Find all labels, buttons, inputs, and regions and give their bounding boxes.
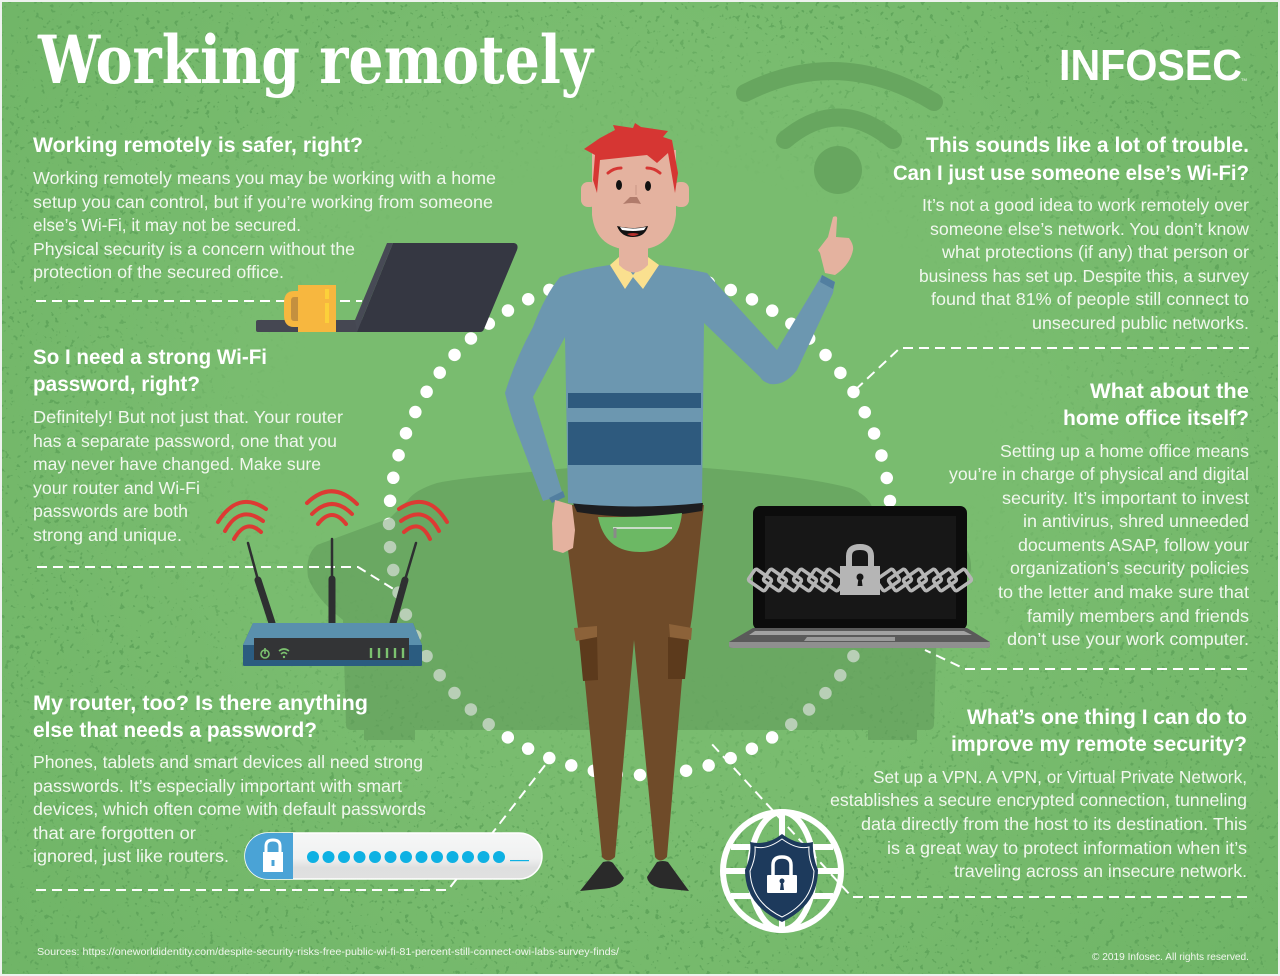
body text: data directly from the host to its destination. This <box>861 814 1247 834</box>
panel: other passwords <box>33 692 426 866</box>
body text: passwords are both <box>33 501 188 521</box>
panel: remote security <box>830 706 1247 881</box>
body text: is a great way to protect information when it’s <box>887 838 1247 858</box>
heading: else that needs a password? <box>33 719 317 742</box>
sweater <box>505 265 835 506</box>
icon: large background wifi symbol <box>745 71 934 194</box>
shield <box>745 834 818 922</box>
body text <box>949 441 1249 649</box>
heading <box>893 134 1249 185</box>
body text: don’t use your work computer. <box>1007 629 1249 649</box>
globe <box>723 812 841 930</box>
panel: working remotely is safer <box>33 134 496 282</box>
chain <box>748 569 972 591</box>
body text: unsecured public networks. <box>1032 313 1249 333</box>
panel: home office <box>949 380 1249 649</box>
body text: family members and friends <box>1027 606 1249 626</box>
heading <box>1063 380 1249 430</box>
body text: organization’s security policies <box>1010 558 1249 578</box>
eyebrows <box>608 168 660 173</box>
heading: Working remotely is safer, right? <box>33 134 363 157</box>
icon: password bar <box>245 833 542 879</box>
heading: This sounds like a lot of trouble. <box>926 134 1249 157</box>
heading: What about the <box>1090 380 1249 403</box>
body text: in antivirus, shred unneeded <box>1023 511 1249 531</box>
pointing hand <box>818 216 853 275</box>
laptop base <box>729 628 990 648</box>
body text: setup you can control, but if you’re working from someone <box>33 192 493 212</box>
heading: So I need a strong Wi-Fi <box>33 346 267 369</box>
eyes <box>616 180 651 191</box>
title: Working remotely <box>37 21 594 99</box>
panel: someone else's wifi <box>893 134 1249 333</box>
ears <box>581 182 689 207</box>
body text: Set up a VPN. A VPN, or Virtual Private Network, <box>873 767 1247 787</box>
body text: establishes a secure encrypted connection, tunneling <box>830 790 1247 810</box>
sources footer: Sources: https://oneworldidentity.com/despite-security-risks-free-public-wi-fi-81-percent-still-connect-owi-labs-survey-finds/ <box>37 946 619 958</box>
laptop lid <box>753 506 967 630</box>
body text: may never have changed. Make sure <box>33 454 321 474</box>
belt <box>573 503 703 517</box>
heading <box>33 346 267 396</box>
body text: someone else’s network. You don’t know <box>930 219 1249 239</box>
heading: password, right? <box>33 373 200 396</box>
icon: chained laptop <box>729 506 990 648</box>
neck <box>619 245 648 272</box>
body text: that are forgotten or <box>33 823 196 843</box>
body text: It’s not a good idea to work remotely over <box>922 195 1249 215</box>
router indicators <box>261 648 403 658</box>
heading <box>951 706 1247 756</box>
icon: coffee mug and closed laptop <box>256 243 518 332</box>
background couch silhouette <box>307 466 971 740</box>
copyright: © 2019 Infosec. All rights reserved. <box>1092 951 1249 963</box>
body text: what protections (if any) that person or <box>941 242 1249 262</box>
body text: protection of the secured office. <box>33 262 284 282</box>
panel: strong wifi password <box>33 346 343 545</box>
fanny pack <box>598 513 682 552</box>
dotted circle <box>389 273 891 775</box>
cargo pockets <box>574 624 692 681</box>
body text: found that 81% of people still connect to <box>931 289 1249 309</box>
antennas <box>248 539 416 623</box>
signal waves <box>218 491 447 539</box>
icon: globe with shield <box>723 812 841 930</box>
lock <box>767 857 797 893</box>
router body <box>243 623 422 666</box>
icon: wifi router <box>218 491 447 666</box>
heading: My router, too? Is there anything <box>33 692 368 715</box>
heading: What’s one thing I can do to <box>967 706 1247 729</box>
shoes <box>580 861 689 891</box>
body text: you’re in charge of physical and digital <box>949 464 1249 484</box>
laptop base <box>256 320 366 332</box>
body text: passwords. It’s especially important with smart <box>33 776 402 796</box>
body text <box>830 767 1247 881</box>
body text: Definitely! But not just that. Your router <box>33 407 343 427</box>
body text: has a separate password, one that you <box>33 431 337 451</box>
mouth <box>617 226 648 237</box>
hair <box>584 123 678 193</box>
heading: home office itself? <box>1063 407 1249 430</box>
nose <box>623 185 641 204</box>
head <box>592 150 676 250</box>
body text: your router and Wi-Fi <box>33 478 200 498</box>
logo: Infosec: INFOSEC <box>1059 41 1242 90</box>
dashed connector lines <box>36 301 1249 897</box>
cuffs <box>549 275 835 503</box>
heading: improve my remote security? <box>951 733 1247 756</box>
left hand <box>552 500 575 553</box>
collar <box>610 257 659 289</box>
illustration: man <box>505 123 853 891</box>
padlock <box>840 547 880 595</box>
lock <box>263 840 283 872</box>
body text <box>33 407 343 545</box>
trousers <box>568 505 704 860</box>
body text: Setting up a home office means <box>1000 441 1249 461</box>
body text <box>33 168 496 282</box>
body text: strong and unique. <box>33 525 182 545</box>
password dots <box>307 851 529 863</box>
body text: documents ASAP, follow your <box>1018 535 1249 555</box>
logo: Infosec: TM <box>1241 77 1247 82</box>
laptop screen <box>357 243 518 332</box>
body text: Phones, tablets and smart devices all need strong <box>33 752 423 772</box>
body text: traveling across an insecure network. <box>954 861 1247 881</box>
body text: devices, which often come with default passwords <box>33 799 426 819</box>
body text: security. It’s important to invest <box>1002 488 1249 508</box>
body text: ignored, just like routers. <box>33 846 229 866</box>
heading: Can I just use someone else’s Wi-Fi? <box>893 162 1249 185</box>
body text: else’s Wi-Fi, it may not be secured. <box>33 215 301 235</box>
body text <box>919 195 1249 333</box>
heading <box>33 692 368 742</box>
body text <box>33 752 426 866</box>
body text: Working remotely means you may be working with a home <box>33 168 496 188</box>
body text: Physical security is a concern without the <box>33 239 355 259</box>
body text: to the letter and make sure that <box>998 582 1249 602</box>
body text: business has set up. Despite this, a survey <box>919 266 1249 286</box>
sweater stripes <box>568 393 701 465</box>
mug <box>284 291 298 327</box>
